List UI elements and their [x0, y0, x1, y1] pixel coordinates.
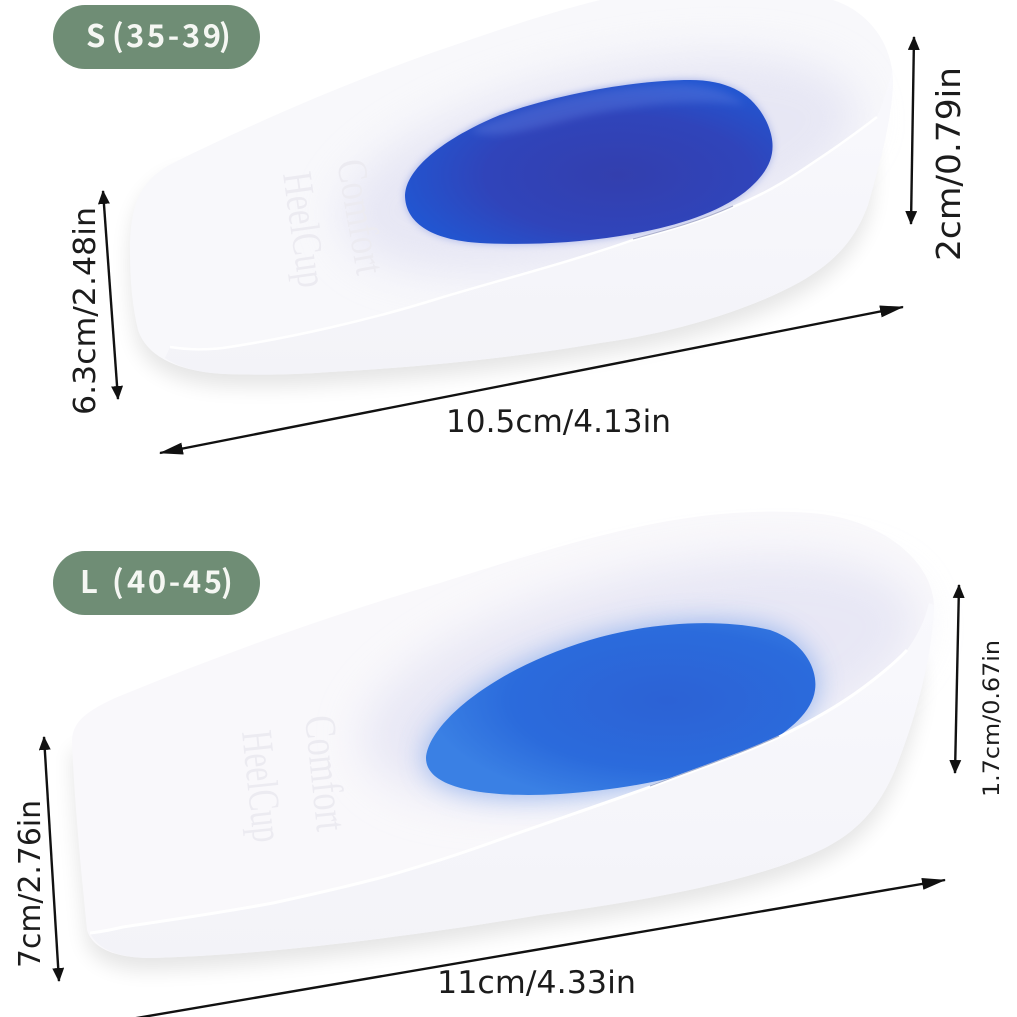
badge: L size: 40-45	[127, 557, 225, 602]
inner cup shading large	[338, 509, 942, 851]
arrow: L length	[125, 880, 945, 1017]
badge: S size: S	[86, 11, 105, 56]
badge: S size: 35-39	[126, 11, 224, 56]
badge: L size	[53, 551, 260, 615]
label: S width: 6.3cm/2.48in	[68, 207, 103, 415]
badge: S size: )	[219, 11, 231, 56]
embossed brand large	[232, 713, 356, 844]
rim wall small	[165, 70, 893, 375]
rim highlight small	[170, 117, 877, 349]
blue gel glow small	[405, 80, 773, 244]
badge: S size: (	[112, 11, 124, 56]
arrow: S length	[160, 307, 903, 453]
label: S height: 2cm/0.79in	[929, 67, 968, 261]
embossed brand large: Comfort	[295, 713, 356, 833]
badge: L size: L	[80, 557, 98, 602]
badge: S size	[53, 5, 260, 69]
label: L height: 1.7cm/0.67in	[980, 640, 1005, 797]
insole body small	[130, 0, 893, 375]
label: L length: 11cm/4.33in	[437, 965, 636, 1001]
blue gel glow large	[426, 623, 815, 795]
rim under-gel line large	[650, 736, 779, 786]
embossed brand small: HeelCup	[273, 169, 335, 290]
insole body large	[72, 512, 934, 958]
gel top highlight small	[470, 84, 745, 135]
badge: L size: )	[221, 557, 233, 602]
blue gel pad small	[405, 80, 773, 244]
panel: large size heel cup	[72, 509, 942, 970]
panel: small size heel cup	[130, 0, 893, 387]
embossed brand small	[273, 156, 393, 290]
rim highlight large	[90, 650, 907, 933]
embossed brand small: Comfort	[327, 156, 393, 278]
shadow large	[72, 652, 921, 970]
blue gel pad large	[426, 623, 815, 795]
label: L width: 7cm/2.76in	[13, 800, 48, 968]
label: S length: 10.5cm/4.13in	[446, 404, 671, 440]
badge: L size: (	[112, 557, 124, 602]
rim wall large	[90, 603, 934, 958]
arrow: S width	[103, 191, 118, 399]
inner cup shading small	[320, 13, 880, 317]
rim under-gel line small	[633, 206, 733, 239]
arrow: S height	[911, 37, 914, 224]
shadow small	[130, 72, 873, 387]
arrow: L width	[44, 737, 59, 981]
arrow: L height	[955, 585, 959, 773]
embossed brand large: HeelCup	[232, 728, 292, 844]
